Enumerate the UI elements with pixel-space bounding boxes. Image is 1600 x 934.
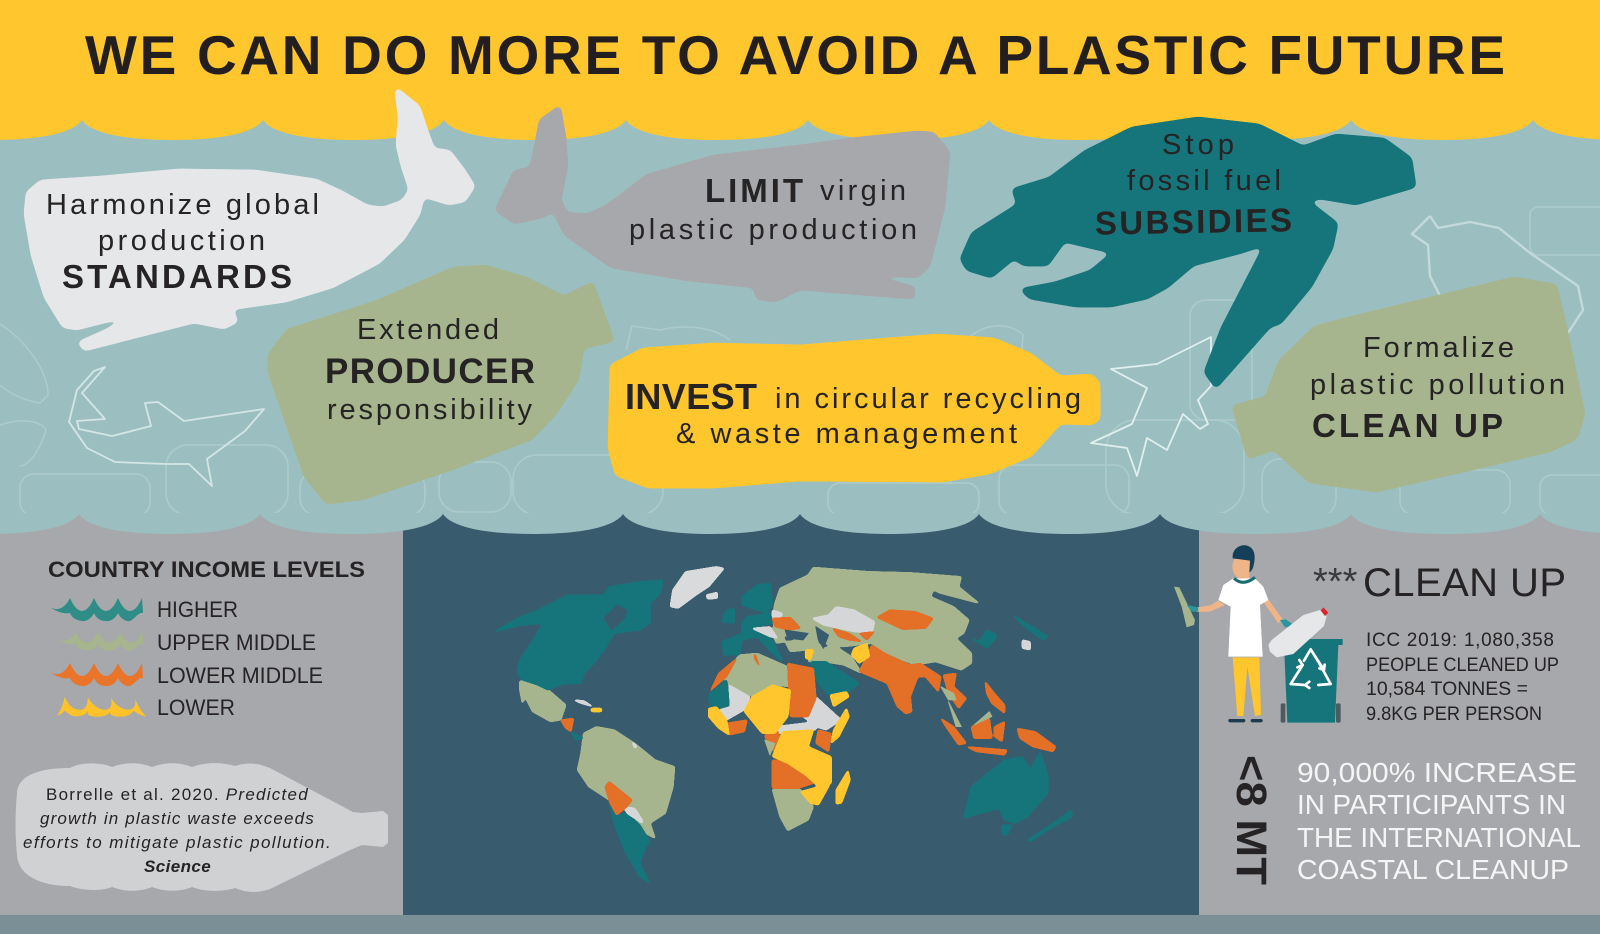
text: extended producer: responsibility: [327, 394, 532, 426]
citation text: efforts to mitigate plastic pollution.: [23, 833, 331, 852]
panel: world map background: [403, 514, 1199, 915]
text: formalize clean up: plastic pollution: [1310, 369, 1565, 401]
text: limit virgin plastic: [629, 172, 917, 246]
yellow bottle shape: [610, 336, 1098, 486]
text: limit virgin plastic: plastic production: [629, 214, 917, 246]
text: participant increase: IN PARTICIPANTS IN: [1297, 789, 1566, 820]
grey whale shape: [497, 108, 948, 300]
legend wave: upper middle: [57, 632, 143, 651]
text: harmonize standards: Harmonize global: [46, 189, 319, 221]
panel: sage bottle - producer: [270, 267, 612, 502]
legend label: lower: LOWER: [157, 695, 235, 720]
citation text: growth in plastic waste exceeds: [40, 809, 314, 828]
text: clean up statistics: [1366, 630, 1559, 725]
panel: white whale - standards: [26, 90, 473, 349]
icon: person: [1187, 545, 1295, 722]
text: invest in circular recycling: INVEST: [625, 376, 757, 417]
map: greenland and iceland: [670, 567, 724, 608]
text: extended producer: [325, 314, 535, 426]
sage bottle shape: [1234, 279, 1583, 490]
map: lower middle income countries: [561, 610, 1056, 815]
text: harmonize standards: [46, 189, 319, 295]
text: harmonize standards: production: [98, 225, 265, 257]
citation bottle shape: [16, 763, 388, 892]
citation text: Borrelle et al. 2020. Predicted: [46, 785, 308, 804]
text: clean up statistics: ICC 2019: 1,080,358: [1366, 630, 1554, 651]
callout: citation bottle: [16, 763, 388, 892]
icon: bottle in hand: [1174, 587, 1195, 627]
text: invest in circular recycling: in circular recycling: [775, 383, 1081, 415]
bottom band: [0, 915, 1600, 934]
citation text: Science: [144, 857, 211, 876]
heading: clean up: ***: [1313, 561, 1358, 603]
legend label: lower middle: LOWER MIDDLE: [157, 663, 323, 688]
citation text: [23, 785, 331, 876]
text: stop fossil fuel subsidies: fossil fuel: [1127, 165, 1281, 197]
panel: grey whale - limit: [497, 108, 948, 300]
text: participant increase: THE INTERNATIONAL: [1297, 822, 1581, 853]
text: clean up statistics: 10,584 TONNES =: [1366, 679, 1528, 700]
turtle shape: [962, 119, 1414, 386]
text: formalize clean up: CLEAN UP: [1312, 407, 1503, 444]
map: lower income countries: [591, 643, 869, 805]
legend label: higher: HIGHER: [157, 597, 238, 622]
panel: legend background: [0, 514, 403, 915]
icon: turtle outline: [1412, 216, 1583, 333]
sage bottle shape: [270, 267, 612, 502]
text: formalize clean up: [1310, 332, 1565, 444]
chart: world map of income levels: [494, 567, 1072, 883]
icon: recycling bin: [1281, 639, 1343, 723]
faint plastic outlines in the sea: [0, 207, 1600, 517]
map: small upper middle overlays: [765, 687, 992, 755]
text: stop fossil fuel subsidies: SUBSIDIES: [1095, 201, 1292, 242]
text: limit virgin plastic: virgin: [820, 175, 906, 207]
heading: clean up: CLEAN UP: [1363, 561, 1566, 605]
text: clean up statistics: PEOPLE CLEANED UP: [1366, 655, 1559, 676]
text: limit virgin plastic: LIMIT: [705, 172, 803, 209]
text: participant increase: COASTAL CLEANUP: [1297, 854, 1569, 885]
icon: large plastic bottle: [1268, 607, 1328, 657]
panel: sage bottle - clean up: [1234, 279, 1583, 490]
panel: clean up figure: [1174, 545, 1343, 723]
map: higher income countries: [494, 580, 1072, 883]
title: WE CAN DO MORE TO AVOID A PLASTIC FUTURE: [85, 24, 1505, 86]
icon: fish outline: [1091, 337, 1211, 476]
panel: yellow bottle - invest: [610, 336, 1098, 486]
legend heading: COUNTRY INCOME LEVELS: [48, 557, 365, 582]
text: stop fossil fuel subsidies: Stop: [1162, 129, 1234, 161]
text: harmonize standards: STANDARDS: [62, 258, 292, 295]
text: invest in circular recycling: [625, 376, 1081, 450]
panel: turtle - subsidies: [962, 119, 1414, 386]
sea scalloped lower edge: [0, 513, 1600, 534]
map: no data countries: [573, 607, 1030, 823]
header yellow band: [0, 0, 1600, 140]
legend label: upper middle: UPPER MIDDLE: [157, 630, 316, 655]
icon: shark outline: [69, 367, 264, 486]
text: participant increase: 90,000% INCREASE: [1297, 757, 1577, 788]
text: extended producer: Extended: [357, 314, 499, 346]
panel: clean up background: [1199, 514, 1600, 915]
legend: country income levels: [48, 557, 365, 720]
map: upper middle income countries: [520, 567, 979, 838]
text: clean up statistics: 9.8KG PER PERSON: [1366, 704, 1542, 725]
map: inland waters: [604, 605, 829, 648]
legend wave: lower middle: [50, 663, 143, 686]
white whale shape: [26, 90, 473, 349]
legend wave: lower: [57, 697, 146, 717]
text: stop fossil fuel subsidies: [1095, 129, 1292, 242]
text: participant increase: [1297, 757, 1581, 885]
rotated label: less than 8 MT: <8 MT: [1227, 755, 1275, 885]
text: formalize clean up: Formalize: [1363, 332, 1514, 364]
text: extended producer: PRODUCER: [325, 352, 535, 391]
text: invest in circular recycling: & waste management: [676, 418, 1017, 450]
legend wave: higher: [50, 598, 143, 621]
